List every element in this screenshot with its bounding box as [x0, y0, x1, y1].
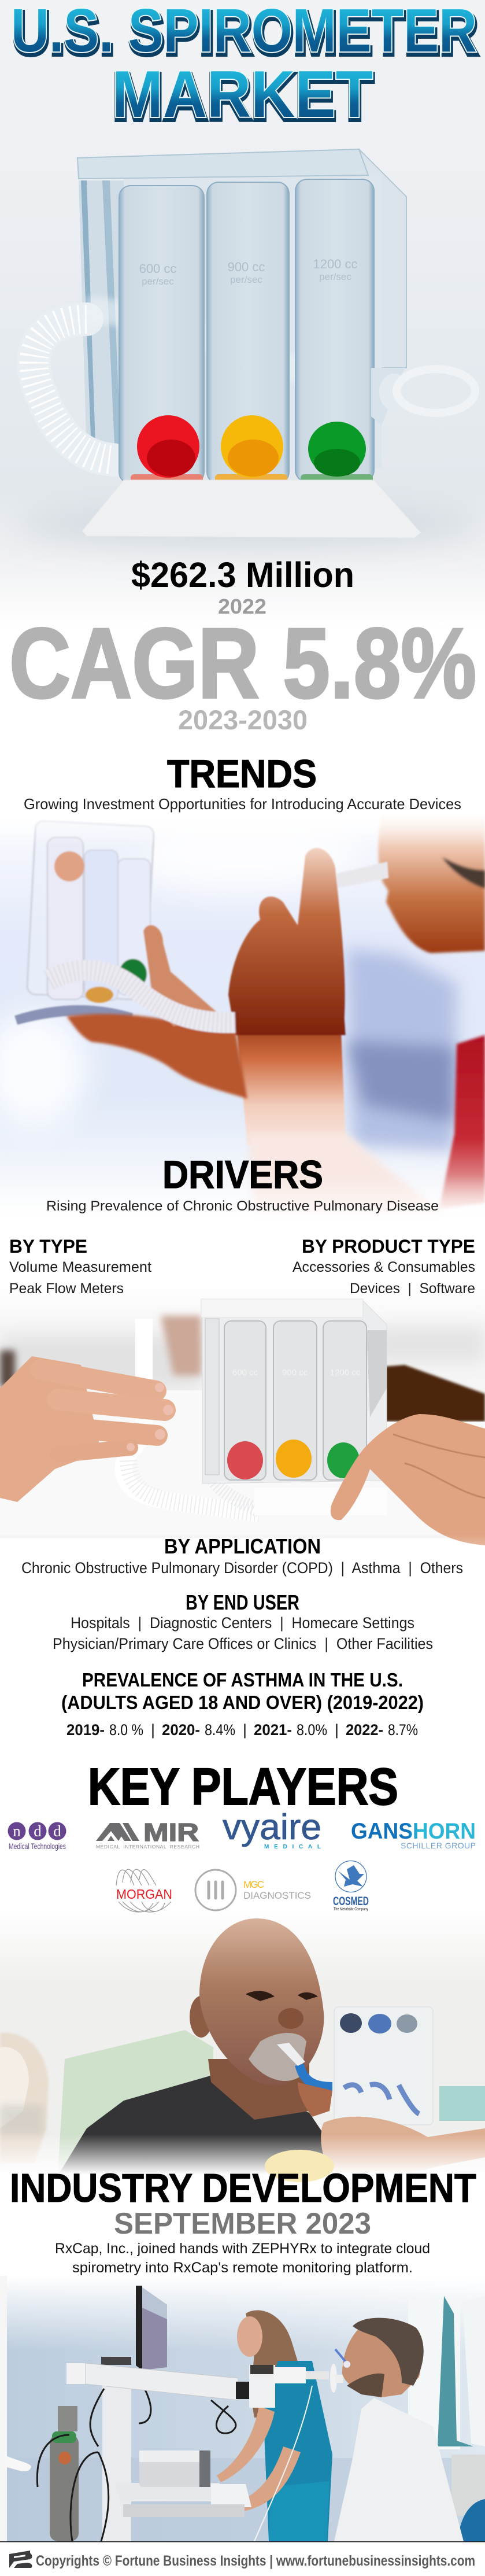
- stats: yearly prevalence: 2021-: [254, 1721, 292, 1739]
- stats: yearly prevalence: [66, 1721, 418, 1739]
- logo: ndd Medical Technologies: d: [34, 1822, 42, 1840]
- door: [0, 2276, 7, 2542]
- mouthpiece ring: [379, 369, 475, 413]
- gown: [58, 2030, 213, 2175]
- logo: Ganshorn Schiller Group: SCHILLER GROUP: [401, 1841, 476, 1850]
- segment: by end user: [53, 1590, 433, 1652]
- hand holding device: [228, 848, 346, 1035]
- spirometer on table: [201, 1299, 387, 1515]
- logo: MIR: [96, 1818, 199, 1850]
- logo: vyaire medical: MEDICAL: [264, 1844, 321, 1850]
- patient: [334, 2318, 464, 2541]
- logo: Morgan: MORGAN: [116, 1887, 172, 1902]
- segment: by type: Peak Flow Meters: [9, 1280, 124, 1297]
- stats: yearly prevalence: 8.0%: [297, 1721, 327, 1739]
- left hand: [0, 1356, 173, 1502]
- mouthpiece: [337, 862, 388, 888]
- segment: by end user: Hospitals | Diagnostic Centers | Homecare Settings: [71, 1614, 414, 1632]
- cable to mouthpiece: [254, 2386, 312, 2541]
- text: development detail: RxCap, Inc., joined hands with ZEPHYRx to integrate cloud: [55, 2241, 430, 2257]
- window and curtain: [408, 2296, 485, 2541]
- segment: by product type: [293, 1236, 475, 1297]
- spirometer head and mouthpiece: [249, 2364, 343, 2408]
- heading: drivers: [46, 1153, 439, 1214]
- hospital bed rail: [0, 2032, 49, 2163]
- stats: yearly prevalence: 2020-: [162, 1721, 200, 1739]
- stats: yearly prevalence: 8.0 %: [109, 1721, 143, 1739]
- segment: by application: BY APPLICATION: [164, 1534, 321, 1558]
- panel: asthma prevalence: PREVALENCE OF ASTHMA IN THE U.S.: [82, 1669, 403, 1691]
- breathing tube: [49, 970, 235, 1023]
- ball: yellow: [276, 1440, 312, 1478]
- spirometer on table: 600 cc: [232, 1368, 258, 1378]
- stat year: 2022: 2022: [218, 595, 266, 618]
- photo: patient using spirometer (trends): [0, 807, 485, 1301]
- fingers and thumb: [66, 1014, 247, 1099]
- text: trend description: Growing Investment Opportunities for Introducing Accurate Devices: [24, 795, 461, 813]
- t-shirt: [55, 2076, 341, 2180]
- heading: drivers: DRIVERS: [162, 1153, 323, 1197]
- logo: Ganshorn Schiller Group: GANSHORN: [351, 1819, 476, 1844]
- ball: yellow: [221, 415, 283, 478]
- tube column: 600 cc: 600 cc: [139, 261, 176, 276]
- tube column: 900 cc: per/sec: [230, 274, 262, 285]
- neck: [208, 2059, 309, 2120]
- segment: by end user: BY END USER: [186, 1590, 299, 1614]
- tube column: 900 cc: 900 cc: [228, 260, 265, 274]
- panel: hero background: [0, 0, 485, 630]
- cables: [90, 2389, 236, 2541]
- logo: MGC Diagnostics: MGC: [243, 1879, 264, 1890]
- blue hose and mouthpiece: [299, 2065, 332, 2087]
- ball: red: [227, 1441, 263, 1479]
- monitor: [136, 2286, 167, 2370]
- spirometer on table: 1200 cc: [330, 1368, 361, 1378]
- heading: industry development: [10, 2165, 476, 2276]
- cart and printer: [114, 2450, 251, 2517]
- tube column: 900 cc: [207, 182, 289, 484]
- logo: vyaire medical: vyaire: [223, 1807, 321, 1847]
- footer: [0, 2541, 485, 2576]
- arm: [235, 1012, 346, 1145]
- logo: Cosmed: The Metabolic Company: [334, 1906, 368, 1911]
- heading: trends: TRENDS: [167, 752, 317, 796]
- stats: yearly prevalence: 2019-: [66, 1721, 105, 1739]
- tube column: 1200 cc: [295, 179, 374, 483]
- segment: by end user: Physician/Primary Care Offices or Clinics | Other Facilities: [53, 1635, 433, 1652]
- heading: key players: KEY PLAYERS: [88, 1758, 398, 1816]
- tube column: 600 cc: per/sec: [142, 276, 174, 287]
- logo: Cosmed: COSMED: [333, 1895, 369, 1908]
- heading: trends: [24, 752, 461, 813]
- oxygen tank: [50, 2406, 79, 2541]
- nurse: [217, 2310, 332, 2541]
- support arm: [66, 2363, 253, 2400]
- text: development detail: spirometry into RxCap's remote monitoring platform.: [72, 2260, 413, 2276]
- segment: by product type: Accessories & Consumables: [293, 1259, 475, 1275]
- hands: [321, 2117, 485, 2175]
- spirometer on table: 900 cc: [282, 1368, 308, 1378]
- stats: yearly prevalence: |: [335, 1721, 339, 1739]
- panel: market value stats: [9, 555, 476, 735]
- ball: green: [308, 422, 366, 477]
- tube column: 1200 cc: 1200 cc: [313, 257, 358, 271]
- handheld device: [334, 2007, 433, 2125]
- icon: Fortune Business Insights logo: [9, 2551, 32, 2568]
- segment: by application: [0, 1534, 485, 1592]
- title: MARKET: [113, 61, 373, 134]
- ball: green: [327, 1442, 360, 1478]
- logo: Morgan: [116, 1869, 172, 1912]
- panel: asthma prevalence: [61, 1669, 424, 1739]
- text: driver description: Rising Prevalence of Chronic Obstructive Pulmonary Disease: [46, 1198, 439, 1214]
- photo: elderly patient with spirometer: [0, 1909, 485, 2276]
- title: MARKET: [112, 58, 373, 131]
- photo: hands with spirometer on table: [0, 1287, 485, 1545]
- panel: asthma prevalence: (ADULTS AGED 18 AND OVER) (2019-2022): [61, 1692, 424, 1713]
- segment: by type: [9, 1236, 151, 1297]
- stats: yearly prevalence: 2022-: [346, 1721, 383, 1739]
- yellow highlight: [265, 2150, 334, 2182]
- tube column: 600 cc: [119, 186, 204, 484]
- stat period: 2023-2030: 2023-2030: [178, 704, 308, 735]
- date: september 2023: SEPTEMBER 2023: [114, 2207, 371, 2241]
- stats: yearly prevalence: 8.4%: [205, 1721, 235, 1739]
- logo: MIR: MIR: [143, 1818, 199, 1847]
- logo: ndd Medical Technologies: Medical Technologies: [9, 1841, 66, 1851]
- photo: spirometry test in clinic: [0, 2276, 485, 2542]
- logo: MGC Diagnostics: [195, 1870, 311, 1910]
- stats: yearly prevalence: 8.7%: [388, 1721, 418, 1739]
- segment: by type: BY TYPE: [9, 1236, 87, 1257]
- logo: Cosmed: [333, 1861, 369, 1911]
- white tube: [124, 1319, 260, 1514]
- head: [190, 1918, 324, 2086]
- device: [14, 821, 154, 1025]
- right hand: [331, 1414, 485, 1545]
- segment: by type: Volume Measurement: [9, 1259, 151, 1275]
- logo: ndd Medical Technologies: [8, 1822, 66, 1851]
- logo: MIR: MEDICAL INTERNATIONAL RESEARCH: [96, 1844, 199, 1850]
- text: development detail: [55, 2241, 430, 2276]
- stats: yearly prevalence: |: [151, 1721, 155, 1739]
- ball: red: [137, 415, 199, 478]
- logo: MGC Diagnostics: DIAGNOSTICS: [243, 1890, 311, 1901]
- segment: by product type: Devices | Software: [350, 1280, 475, 1297]
- logo: ndd Medical Technologies: d: [53, 1822, 61, 1840]
- column: [102, 2383, 131, 2541]
- title: [11, 0, 478, 134]
- segment: by product type: BY PRODUCT TYPE: [302, 1236, 475, 1257]
- stats: yearly prevalence: |: [243, 1721, 247, 1739]
- patient's face: [378, 815, 485, 953]
- stat: 2022 market size: $262.3 Million: [131, 555, 354, 595]
- illustration: tri-ball spirometer: [17, 149, 480, 547]
- tube column: 1200 cc: per/sec: [319, 271, 351, 282]
- logo: ndd Medical Technologies: n: [13, 1822, 21, 1840]
